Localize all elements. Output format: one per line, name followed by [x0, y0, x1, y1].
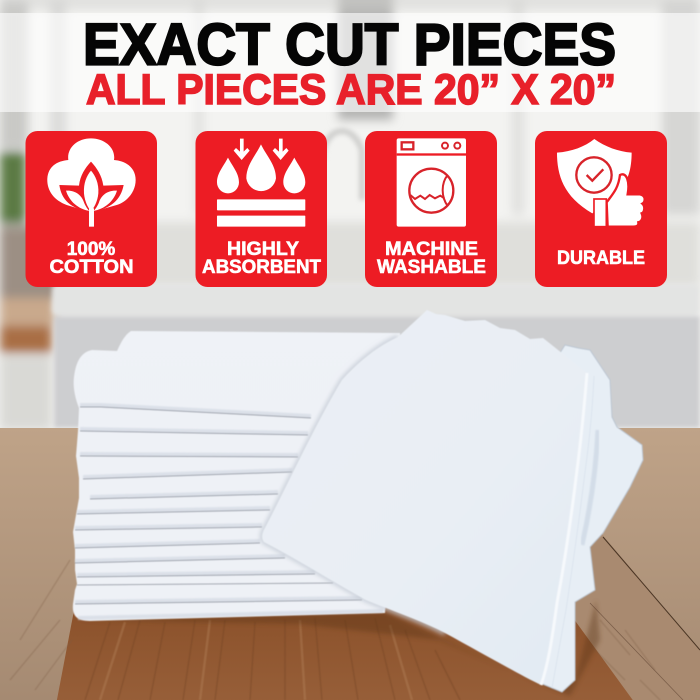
soft fold shading	[75, 405, 383, 618]
label: 100%	[67, 239, 115, 260]
panel: durable	[535, 131, 667, 287]
label: HIGHLY	[227, 239, 299, 260]
icon: water drops over layers	[217, 139, 305, 227]
panel: 100% cotton: COTTON	[50, 257, 134, 278]
stacked towels	[73, 331, 400, 621]
panel: highly absorbent	[196, 131, 327, 287]
translucent header band	[0, 13, 700, 112]
back towel inner fold	[582, 430, 598, 545]
front towel	[262, 310, 587, 685]
panel: 100% cotton	[26, 131, 157, 287]
panel: highly absorbent: ABSORBENT	[202, 257, 321, 278]
label: MACHINE	[385, 239, 478, 260]
wooden table	[0, 428, 700, 700]
front towel edge shadow	[262, 337, 445, 633]
fold lines	[75, 407, 362, 604]
icon: washing machine	[397, 138, 466, 227]
title: EXACT CUT PIECES	[83, 12, 616, 78]
panel: machine washable	[365, 131, 497, 287]
icon: shield and thumbs up	[557, 139, 645, 227]
towels	[73, 310, 643, 692]
shadow beneath the towel stack	[78, 600, 600, 696]
panel: machine washable: WASHABLE	[377, 257, 486, 278]
icon: cotton boll	[47, 138, 136, 227]
label: DURABLE	[557, 248, 645, 269]
back folded towel	[530, 345, 643, 692]
subtitle: ALL PIECES ARE 20” X 20”	[86, 66, 616, 114]
